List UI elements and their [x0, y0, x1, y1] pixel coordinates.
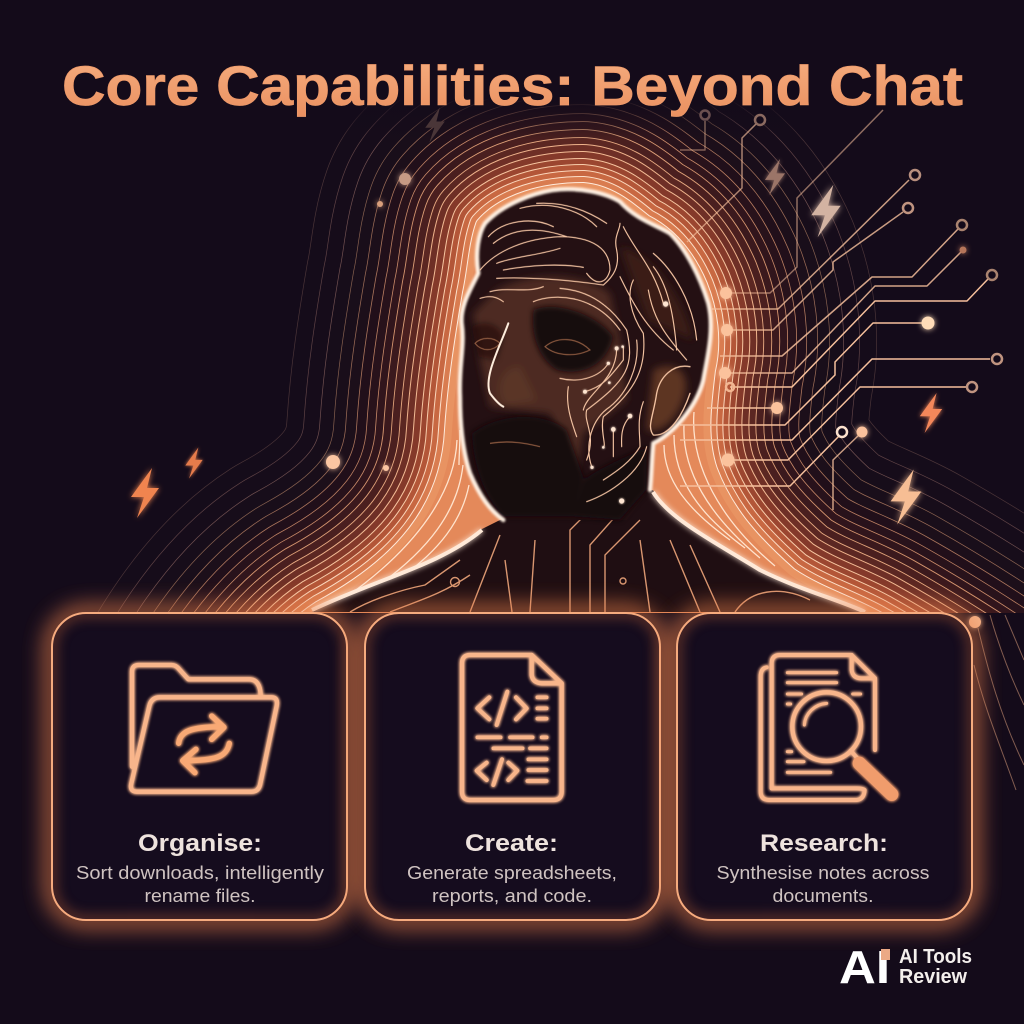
- icon: folder with sync arrows: [131, 665, 277, 792]
- trace end rings: [700, 110, 1002, 437]
- description: organise: Sort downloads, intelligently: [76, 862, 325, 883]
- logo wordmark line 1: AI Tools: [899, 946, 972, 968]
- fade behind title: [0, 0, 1024, 98]
- panel: create: [365, 613, 660, 920]
- icon: documents with magnifier: [761, 655, 892, 800]
- bolt: left large: [131, 468, 159, 518]
- heading: create: Create:: [465, 830, 558, 857]
- face node dots: [583, 301, 668, 504]
- shirt and collar circuit lines: [350, 490, 810, 612]
- description line 2: organise: rename files.: [144, 885, 256, 906]
- bolt: right orange: [920, 393, 942, 433]
- icon: code document: [462, 655, 562, 800]
- bolt: faint top: [425, 108, 445, 142]
- head: [460, 189, 711, 520]
- trace group: [680, 110, 990, 510]
- eyes and beard shadows: [472, 307, 647, 520]
- icon: sync arrows: [179, 716, 229, 773]
- heading: research: Research:: [760, 830, 888, 857]
- magnifier: [792, 692, 892, 794]
- contour lines inside the neck glow: [345, 412, 775, 598]
- head silhouette: [460, 189, 711, 520]
- lightning bolts and floating sparks: [131, 108, 981, 628]
- hair and forehead lines: [480, 203, 697, 502]
- description: research: Synthesise notes across: [716, 862, 930, 883]
- skin tones: [473, 247, 693, 473]
- logo mark: AI: [839, 941, 890, 993]
- trace end dots: [719, 246, 966, 466]
- panel: research: [677, 613, 972, 920]
- bolt: right lower peach: [891, 470, 921, 524]
- contour lines to the right of the last card: [974, 615, 1024, 790]
- logo wordmark line 2: Review: [899, 966, 967, 988]
- description: create: Generate spreadsheets,: [407, 862, 617, 883]
- eye highlights: [475, 338, 590, 447]
- panel: organise: [52, 613, 347, 920]
- portrait figure: [312, 189, 865, 612]
- sparks: [326, 173, 981, 628]
- title: Core Capabilities: Beyond Chat: [62, 54, 963, 117]
- logo: AI Tools Review: [839, 941, 972, 993]
- bolt: upper right small: [765, 159, 785, 195]
- bolt: upper right large: [811, 185, 841, 237]
- circuit traces on the right side: [680, 110, 1002, 510]
- description line 2: create: reports, and code.: [432, 885, 592, 906]
- torso: [312, 490, 865, 612]
- heading: organise: Organise:: [138, 830, 262, 857]
- bright head outline: [460, 189, 711, 520]
- bolt: left small: [185, 448, 203, 478]
- contour lines radiating around the figure: [200, 190, 1024, 780]
- description line 2: research: documents.: [772, 885, 874, 906]
